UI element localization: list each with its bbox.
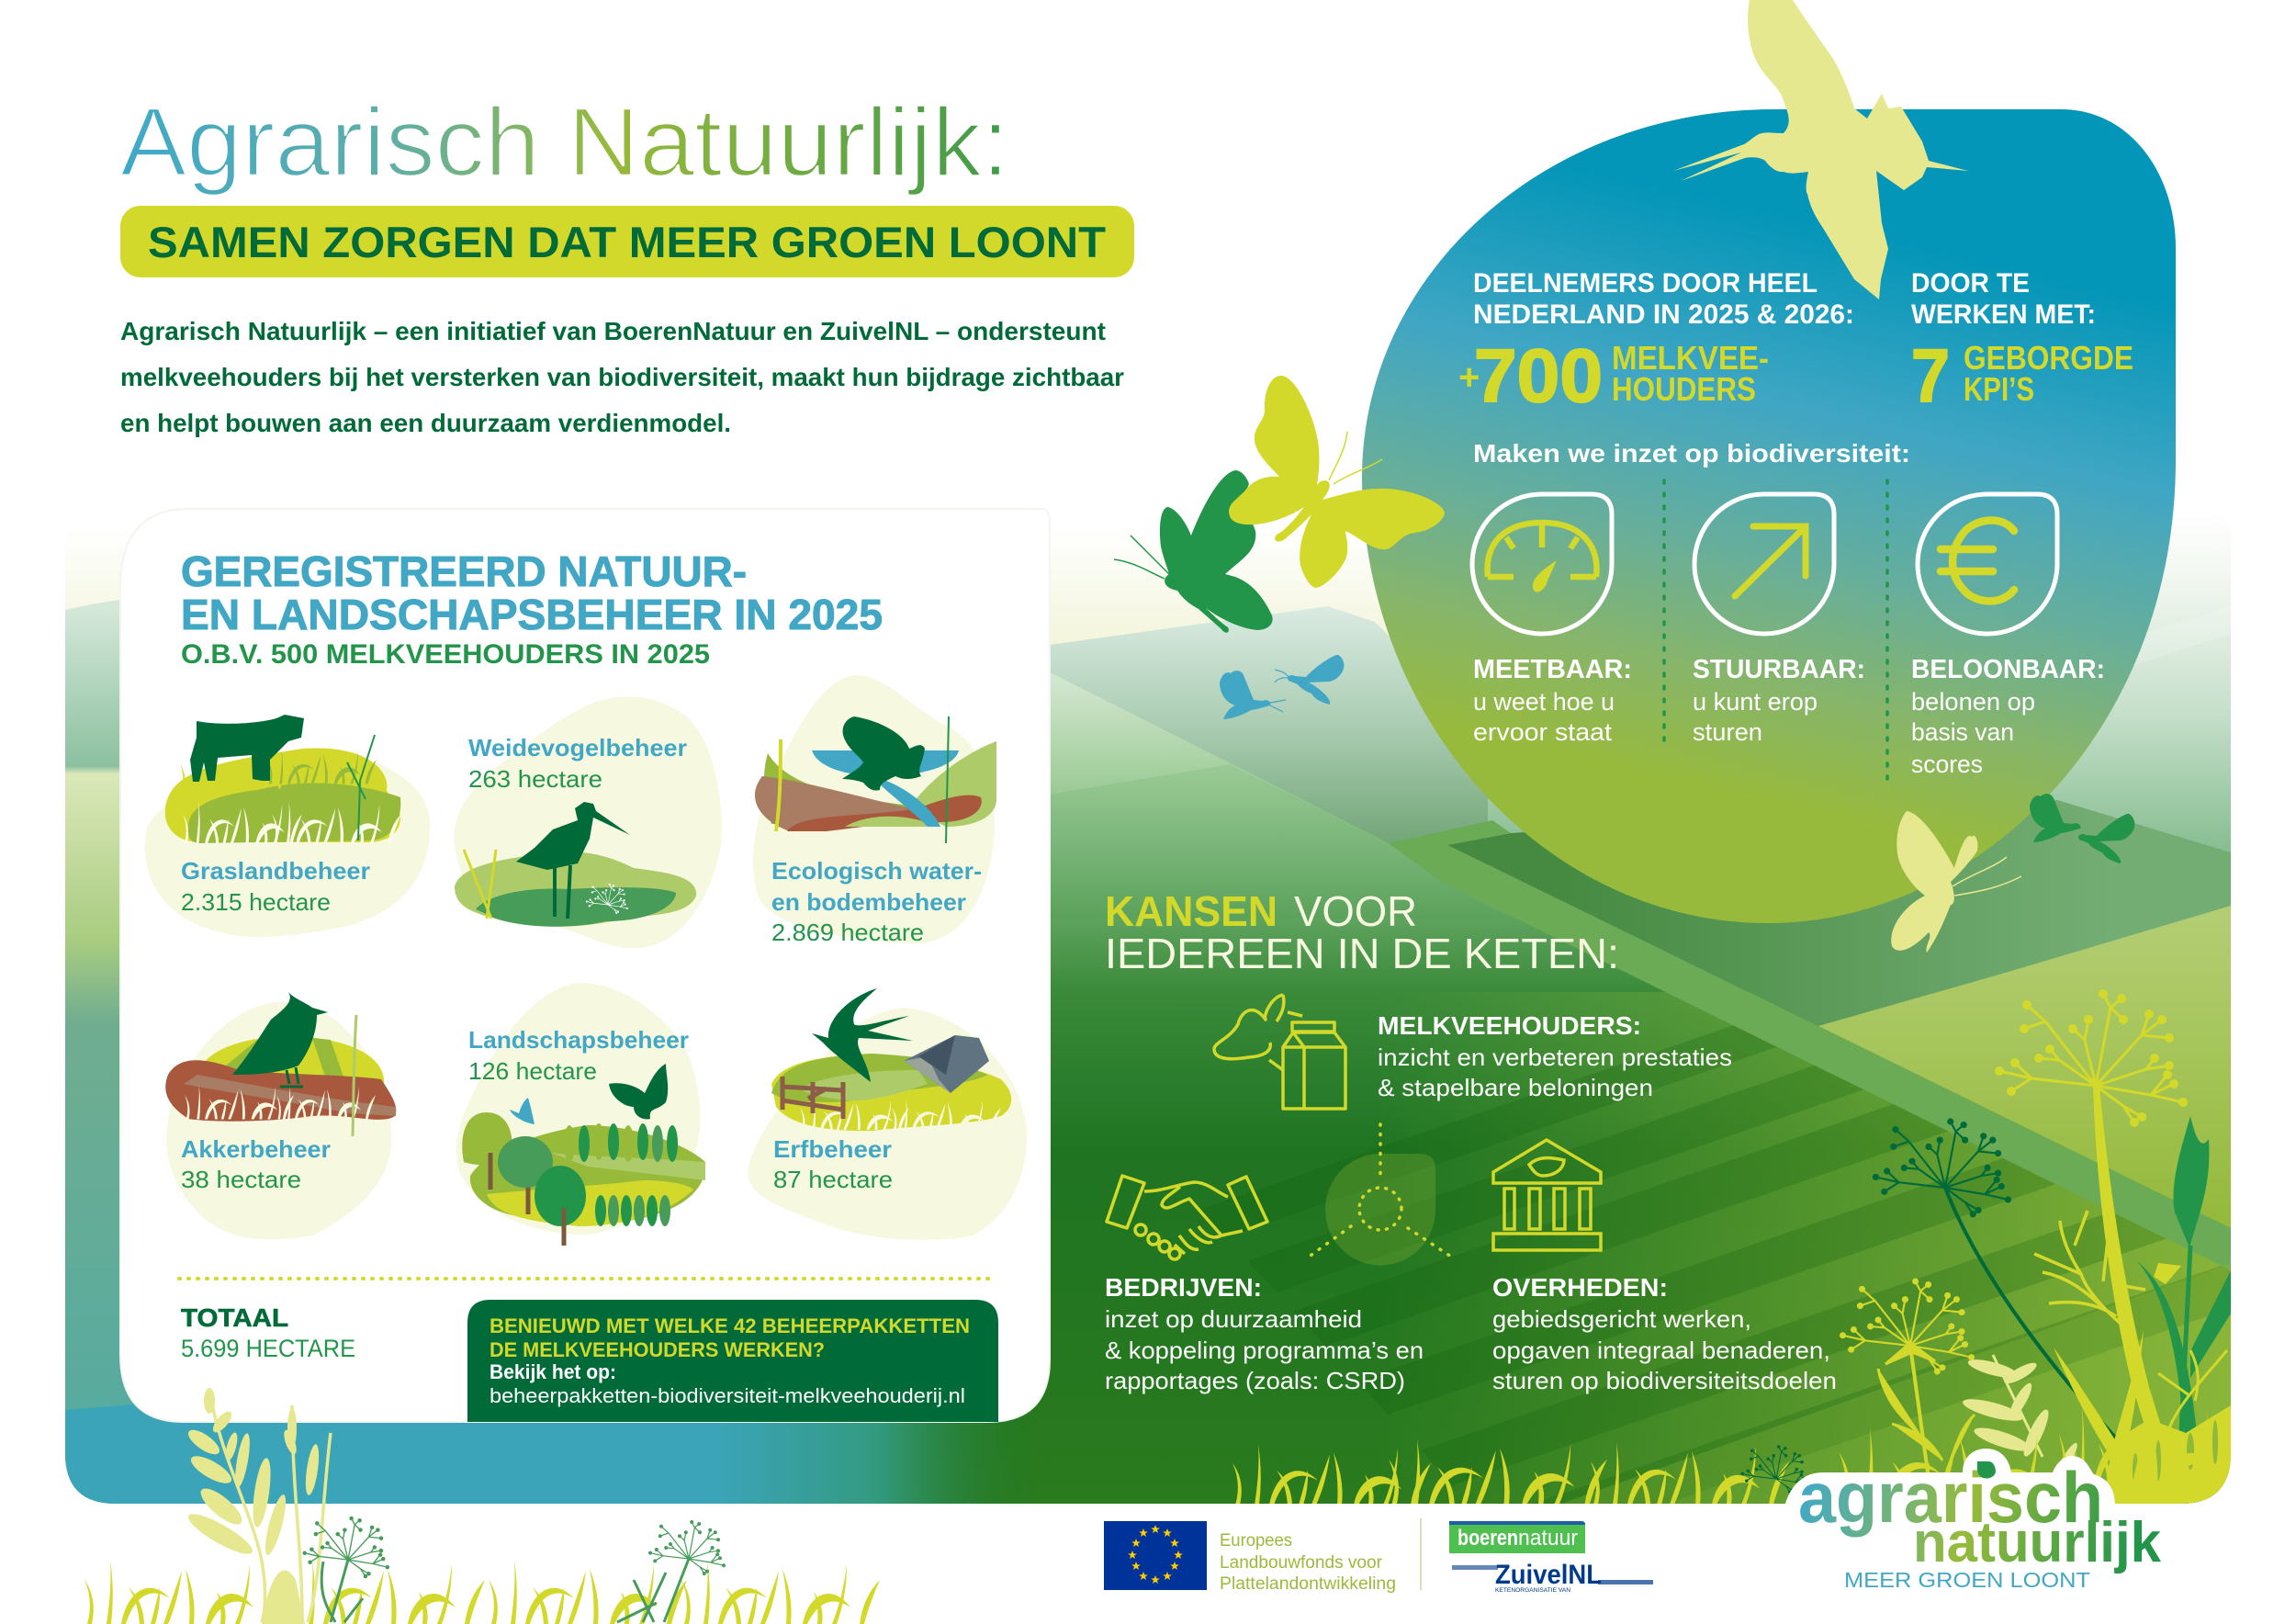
heading: kansen: [1105, 887, 1619, 977]
card subheading: O.B.V. 500 MELKVEEHOUDERS IN 2025: [181, 639, 710, 670]
icon: dark green butterfly: [1114, 470, 1273, 633]
callout: beheerpakketten: BENIEUWD MET WELKE 42 BEHEERPAKKETTEN: [490, 1314, 970, 1337]
logo: ZuivelNL: [1452, 1560, 1653, 1594]
KPI intro text: WERKEN MET:: [1911, 299, 2096, 330]
stat: 7 geborgde KPI's: [1911, 334, 2133, 418]
total: [181, 1303, 355, 1362]
rewardable text: [1911, 655, 2105, 778]
melkveehouders text: MELKVEEHOUDERS:: [1378, 1011, 1641, 1040]
steerable text: sturen: [1693, 718, 1762, 746]
logo: agrarisch natuurlijk: natuurlijk: [1913, 1511, 2162, 1574]
rewardable text: scores: [1911, 750, 1983, 778]
callout: beheerpakketten: DE MELKVEEHOUDERS WERKEN?: [490, 1338, 825, 1361]
panel: registered management card: [120, 509, 1050, 1422]
KPI intro text: [1911, 268, 2096, 330]
title: Agrarisch Natuurlijk:: [120, 88, 1009, 197]
bedrijven text: inzet op duurzaamheid: [1105, 1305, 1362, 1333]
item: graslandbeheer: [145, 715, 430, 937]
logo: EU flag: [1104, 1521, 1207, 1590]
participants text block: [1473, 268, 1854, 330]
melkveehouders text: [1378, 1011, 1732, 1101]
overheden text: OVERHEDEN:: [1492, 1273, 1668, 1302]
bedrijven text: BEDRIJVEN:: [1105, 1273, 1262, 1302]
stat: 7 geborgde KPI's: GEBORGDE: [1964, 339, 2133, 377]
steerable text: STUURBAAR:: [1693, 655, 1865, 684]
item: water en bodembeheer: en bodembeheer: [771, 888, 966, 916]
icon: flying godwit: [1673, 0, 1968, 299]
item: landschapsbeheer: [456, 983, 705, 1246]
icon: handshake: [1107, 1176, 1267, 1259]
item: erfbeheer: [748, 988, 1027, 1240]
callout: beheerpakketten: Bekijk het op:: [490, 1360, 616, 1383]
logo: boerennatuur: [1449, 1521, 1585, 1553]
intro text: melkveehouders bij het versterken van biodiversiteit, maakt hun bijdrage zichtbaar: [120, 363, 1124, 391]
stat: +700 melkveehouders: [1458, 334, 1769, 418]
biodiversity heading: Maken we inzet op biodiversiteit:: [1473, 439, 1910, 468]
icon: government building: [1493, 1140, 1601, 1250]
melkveehouders text: & stapelbare beloningen: [1378, 1074, 1653, 1101]
logo: boerennatuur: boeren: [1458, 1526, 1518, 1551]
bedrijven text: [1105, 1273, 1424, 1394]
total: 5.699 HECTARE: [181, 1335, 355, 1362]
plants: bottom left grasses: [84, 1388, 880, 1624]
item: erfbeheer: 87 hectare: [773, 1166, 893, 1193]
item: weidevogelbeheer: Weidevogelbeheer: [468, 734, 687, 761]
stat: +700 melkveehouders: +: [1458, 357, 1480, 398]
subtitle banner: SAMEN ZORGEN DAT MEER GROEN LOONT: [148, 218, 1106, 266]
intro text: en helpt bouwen aan een duurzaam verdienmodel.: [120, 409, 731, 437]
icon: cow and milk carton: [1214, 995, 1345, 1109]
icon: network centre: [1308, 1124, 1451, 1266]
steerable text: [1693, 655, 1865, 746]
item: akkerbeheer: [165, 992, 396, 1239]
item: landschapsbeheer: 126 hectare: [468, 1057, 597, 1085]
overheden text: sturen op biodiversiteitsdoelen: [1492, 1367, 1837, 1394]
stat: +700 melkveehouders: 700: [1474, 334, 1603, 418]
overheden text: [1492, 1273, 1837, 1394]
bedrijven text: rapportages (zoals: CSRD): [1105, 1367, 1405, 1394]
item: water en bodembeheer: 2.869 hectare: [771, 919, 924, 946]
callout: beheerpakketten: [467, 1300, 998, 1422]
card heading: GEREGISTREERD NATUUR-: [181, 547, 747, 595]
rewardable text: basis van: [1911, 718, 2014, 746]
item: weidevogelbeheer: [454, 697, 722, 948]
logo: agrarisch natuurlijk: agrarisch: [1798, 1457, 2103, 1538]
logo: agrarisch natuurlijk: MEER GROEN LOONT: [1844, 1568, 2090, 1592]
item: erfbeheer: Erfbeheer: [773, 1135, 892, 1163]
total: TOTAAL: [181, 1303, 288, 1332]
EU fund text: Europees: [1220, 1531, 1292, 1551]
bedrijven text: & koppeling programma’s en: [1105, 1336, 1424, 1364]
item: graslandbeheer: 2.315 hectare: [181, 888, 331, 916]
item: landschapsbeheer: Landschapsbeheer: [468, 1026, 689, 1054]
EU fund text: Landbouwfonds voor: [1220, 1553, 1383, 1573]
EU fund text: [1220, 1531, 1396, 1594]
icon: pale butterfly: [1891, 811, 2021, 953]
item: akkerbeheer: Akkerbeheer: [181, 1135, 331, 1163]
measurable text: MEETBAAR:: [1473, 655, 1632, 684]
subtitle banner: [120, 206, 1134, 277]
item: graslandbeheer: Graslandbeheer: [181, 857, 370, 885]
participants text block: DEELNEMERS DOOR HEEL: [1473, 268, 1818, 299]
item: akkerbeheer: 38 hectare: [181, 1166, 301, 1193]
heading: kansen: KANSEN: [1105, 887, 1277, 935]
logo: ZuivelNL: ZuivelNL: [1495, 1560, 1602, 1590]
intro text: Agrarisch Natuurlijk – een initiatief van BoerenNatuur en ZuivelNL – ondersteunt: [120, 317, 1106, 345]
logo: boerennatuur: natuur: [1518, 1526, 1578, 1551]
icon: meter: [1472, 494, 1612, 634]
measurable text: u weet hoe u: [1473, 688, 1615, 716]
heading: kansen: IEDEREEN IN DE KETEN:: [1105, 930, 1619, 977]
KPI intro text: DOOR TE: [1911, 268, 2030, 299]
logo: agrarisch natuurlijk: [1784, 1449, 2162, 1592]
EU fund text: Plattelandontwikkeling: [1220, 1574, 1396, 1594]
measurable text: [1473, 655, 1632, 746]
overheden text: gebiedsgericht werken,: [1492, 1305, 1751, 1333]
icon: euro: [1918, 494, 2057, 634]
participants text block: NEDERLAND IN 2025 & 2026:: [1473, 299, 1854, 330]
icon: green insects: [2030, 794, 2134, 863]
stat: +700 melkveehouders: HOUDERS: [1612, 370, 1756, 408]
heading: kansen: VOOR: [1294, 887, 1417, 935]
icon: arrow: [1694, 494, 1834, 634]
card heading: [181, 547, 883, 638]
dotted dividers: [1664, 480, 1887, 787]
stat: +700 melkveehouders: MELKVEE-: [1612, 339, 1769, 377]
item: weidevogelbeheer: 263 hectare: [468, 765, 602, 793]
rewardable text: BELOONBAAR:: [1911, 655, 2105, 684]
landscape background panel: [65, 548, 2231, 1504]
measurable text: ervoor staat: [1473, 718, 1613, 746]
item: water en bodembeheer: [753, 675, 996, 946]
plants: bottom right meadow: [1232, 989, 2237, 1506]
card heading: EN LANDSCHAPSBEHEER IN 2025: [181, 591, 883, 638]
steerable text: u kunt erop: [1693, 688, 1818, 716]
rewardable text: belonen op: [1911, 688, 2035, 716]
logo: ZuivelNL: KETENORGANISATIE VAN: [1495, 1588, 1570, 1594]
icon: blue insects: [1220, 655, 1344, 719]
right blob panel: [1362, 109, 2176, 923]
overheden text: opgaven integraal benaderen,: [1492, 1336, 1830, 1364]
icon: lime butterfly: [1229, 376, 1445, 588]
melkveehouders text: inzicht en verbeteren prestaties: [1378, 1043, 1732, 1071]
item: water en bodembeheer: Ecologisch water-: [771, 857, 982, 885]
intro text: [120, 317, 1124, 437]
stat: 7 geborgde KPI's: KPI’S: [1964, 370, 2034, 408]
callout: beheerpakketten: beheerpakketten-biodiversiteit-melkveehouderij.nl: [490, 1384, 965, 1407]
stat: 7 geborgde KPI's: 7: [1911, 334, 1950, 418]
